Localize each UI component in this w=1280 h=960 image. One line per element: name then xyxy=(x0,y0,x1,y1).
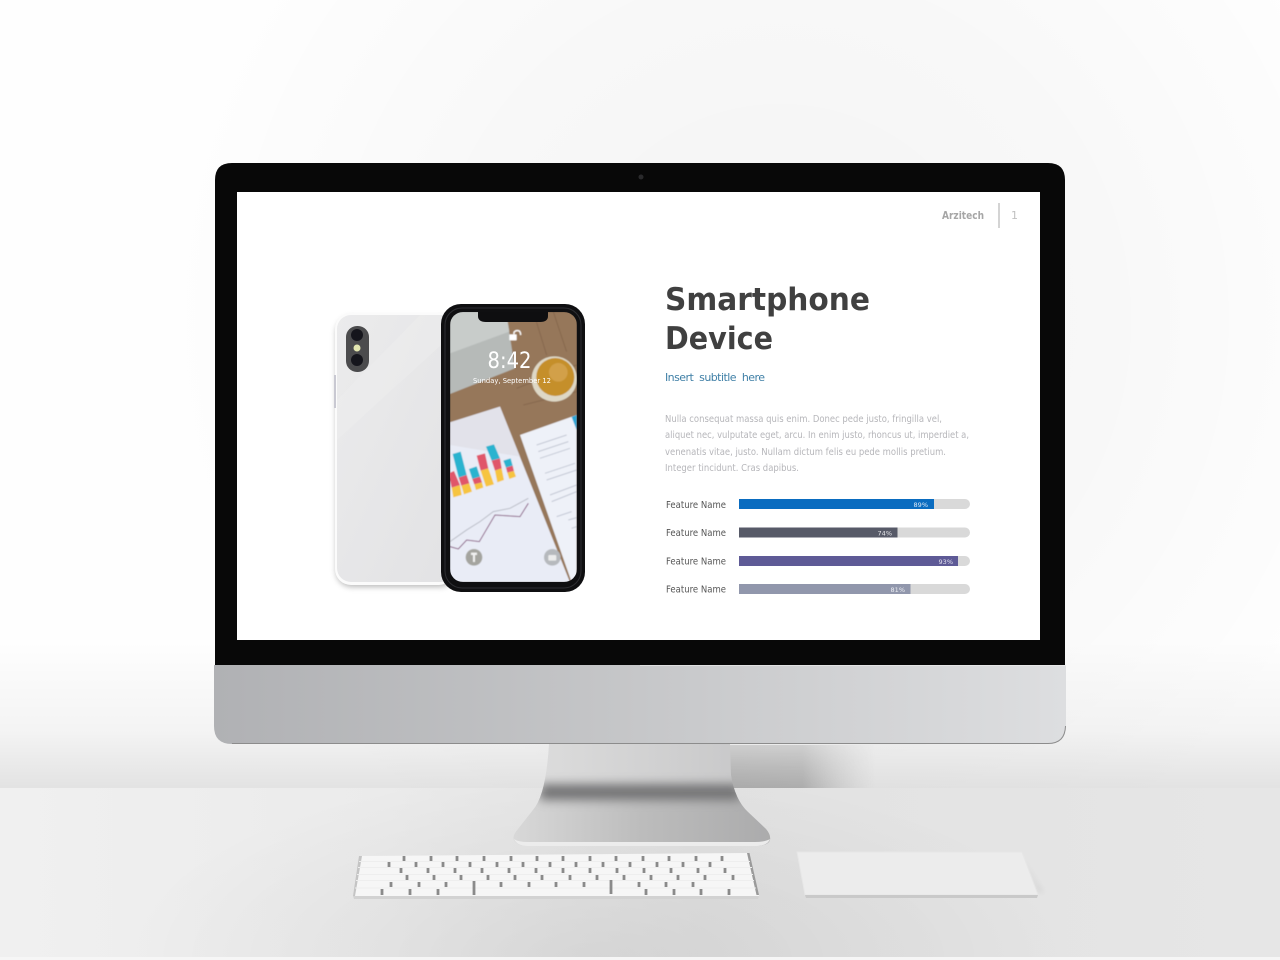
icon: black phone front xyxy=(441,304,585,592)
stacked bars xyxy=(449,444,516,497)
report paper right xyxy=(520,415,577,582)
camera module xyxy=(346,326,369,372)
feature bar 81% xyxy=(666,584,970,596)
line chart xyxy=(450,498,528,542)
feature bar 93%: 93% xyxy=(939,558,953,566)
body text xyxy=(665,414,969,474)
phone pair illustration xyxy=(334,304,585,592)
trackpad xyxy=(797,852,1045,898)
slide screen xyxy=(237,192,1040,640)
padlock xyxy=(509,334,517,340)
lock screen date: Sunday, September 12 xyxy=(473,377,551,385)
title: Smartphone xyxy=(665,282,870,318)
feature bar 74%: 74% xyxy=(878,530,892,538)
brand name: Arzitech xyxy=(942,210,984,222)
page number: 1 xyxy=(1011,209,1018,222)
feature bar 93% xyxy=(666,556,970,568)
monitor xyxy=(214,163,1066,744)
feature bar 81%: 81% xyxy=(891,586,905,594)
monitor stand xyxy=(505,744,780,848)
slide header xyxy=(942,203,1018,228)
feature bar 89%: Feature Name xyxy=(666,500,726,511)
feature bar chart xyxy=(666,499,970,596)
body text: Integer tincidunt. Cras dapibus. xyxy=(665,463,799,474)
lock screen buttons xyxy=(466,549,482,566)
monitor chin xyxy=(214,665,1066,744)
coffee cup xyxy=(532,356,577,402)
monitor bezel xyxy=(215,163,1065,665)
body text: Nulla consequat massa quis enim. Donec pede justo, fringilla vel, xyxy=(665,414,942,425)
feature bar 89% xyxy=(666,499,970,511)
title line 2: Device xyxy=(665,321,773,357)
feature bar 93%: Feature Name xyxy=(666,556,726,568)
feature bar 74% xyxy=(666,528,970,539)
feature bar 89%: 89% xyxy=(914,501,928,509)
body text: aliquet nec, vulputate eget, arcu. In enim justo, rhoncus ut, imperdiet a, xyxy=(665,430,969,441)
icon: white phone back xyxy=(334,313,456,587)
feature bar 74%: Feature Name xyxy=(666,528,726,539)
feature bar 81%: Feature Name xyxy=(666,584,726,596)
webcam xyxy=(638,174,644,180)
lock screen time: 8:42 xyxy=(488,349,532,374)
report paper left xyxy=(450,407,570,582)
subtitle: Insert subtitle here xyxy=(665,371,765,384)
laptop corner xyxy=(450,332,516,394)
keyboard xyxy=(353,853,759,899)
wood table xyxy=(450,312,577,582)
body text: venenatis vitae, justo. Nullam dictum felis eu pede mollis pretium. xyxy=(665,447,946,458)
notch xyxy=(478,312,548,322)
